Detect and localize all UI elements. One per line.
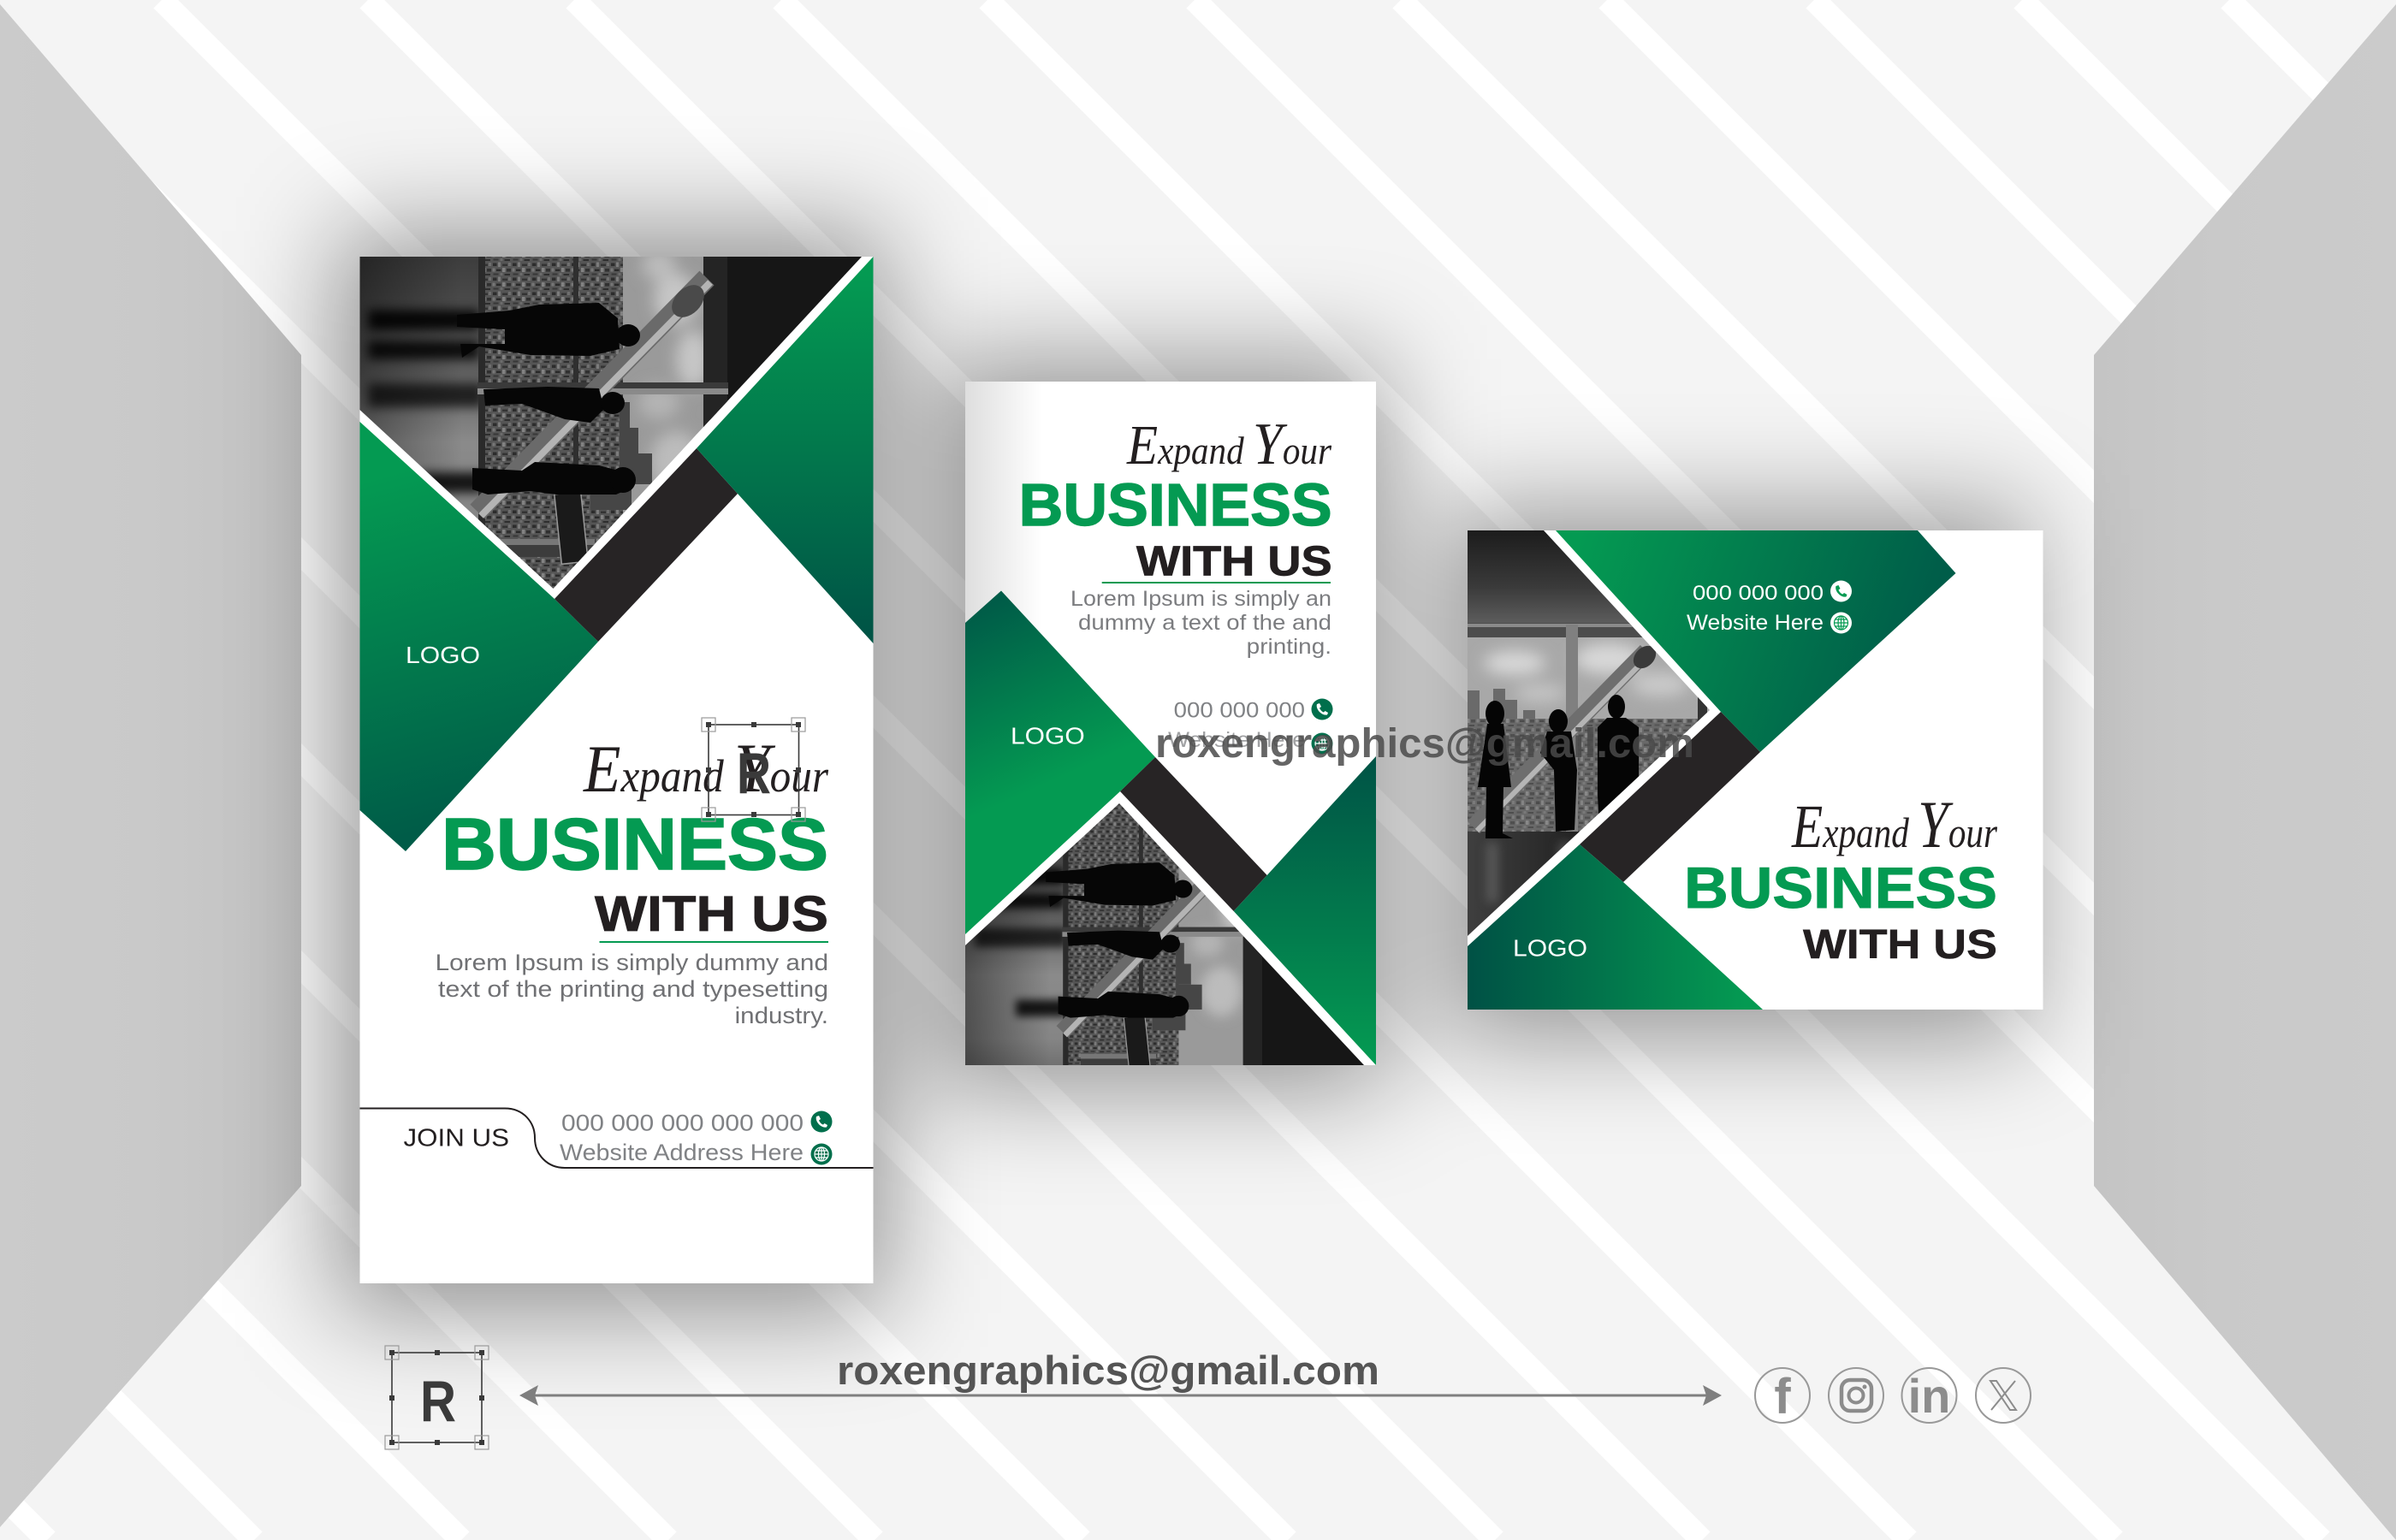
heading: business: BUSINESS (1019, 471, 1332, 538)
curved divider line (359, 1109, 873, 1168)
icon: phone (811, 1111, 832, 1133)
bottom email address: roxengraphics@gmail.com (837, 1348, 1379, 1393)
email watermark across flyers: roxengraphics@gmail.com (1155, 721, 1694, 767)
bottom logo frame (385, 1346, 489, 1449)
left grey wall (0, 4, 301, 1527)
green underline (599, 941, 828, 943)
website address: Website Here (1687, 611, 1824, 635)
green shape with logo area (359, 422, 598, 851)
icon: globe (1311, 732, 1333, 755)
photo: office silhouettes rotated (359, 257, 862, 589)
body text: Lorem Ipsum is simply an (1070, 587, 1331, 611)
green top shape (1556, 530, 1956, 752)
dark diagonal band (555, 448, 738, 642)
soft card shadows (338, 231, 2028, 1313)
icon: globe (1830, 613, 1852, 633)
panel: middle flyer (965, 382, 1376, 1065)
script heading: Expand Your (1126, 412, 1332, 477)
photo: office silhouettes rotated (965, 803, 1364, 1065)
logo text: LOGO (1011, 722, 1085, 749)
website address: Website Here (1168, 728, 1305, 752)
icon: phone (1830, 580, 1852, 602)
panel: tall left flyer (342, 205, 881, 1283)
phone number: 000 000 000 (1174, 699, 1305, 723)
panel: square flyer (1468, 530, 2043, 1010)
double-headed arrow (519, 1385, 1722, 1406)
heading: with us: WITH US (595, 886, 828, 942)
green underline (1102, 582, 1331, 583)
dark diagonal band (1580, 712, 1760, 882)
social icons (1755, 1368, 2031, 1424)
photo: office silhouettes upright (1468, 530, 1724, 951)
logo text: LOGO (1513, 934, 1587, 962)
icon: x (1976, 1368, 2031, 1423)
body text: dummy a text of the and (1078, 611, 1331, 635)
heading: business: BUSINESS (442, 804, 828, 886)
join us label: JOIN US (404, 1124, 509, 1152)
green right triangle (697, 257, 873, 643)
watermark logo frame (702, 718, 805, 821)
dark diagonal band (1120, 757, 1267, 911)
body text: text of the printing and typesetting (438, 976, 828, 1002)
body text: industry. (735, 1003, 828, 1028)
icon: phone (1311, 698, 1333, 720)
body text: Lorem Ipsum is simply dummy and (436, 950, 828, 975)
body text (1070, 587, 1331, 659)
icon: facebook (1755, 1368, 1810, 1424)
heading: business: BUSINESS (1684, 856, 1997, 921)
website address: Website Address Here (560, 1140, 804, 1165)
heading: with us: WITH US (1136, 539, 1332, 585)
body text (436, 950, 828, 1028)
phone number: 000 000 000 000 000 (561, 1111, 804, 1136)
icon: globe (811, 1143, 832, 1165)
body text: printing. (1247, 635, 1331, 659)
bottom logo frame: R (420, 1369, 456, 1434)
icon: instagram (1829, 1368, 1883, 1423)
green bottom shape (1468, 844, 1763, 1010)
heading: with us: WITH US (1803, 922, 1997, 968)
icon: linkedin: in (1908, 1369, 1950, 1423)
icon: facebook: f (1774, 1369, 1791, 1424)
card inner shading (965, 382, 1042, 638)
green shape with logo area (965, 590, 1155, 934)
script heading: Expand Your (583, 729, 829, 807)
watermark logo frame: R (737, 741, 771, 806)
green right triangle (1234, 756, 1376, 1065)
script heading: Expand Your (1791, 787, 1997, 862)
logo text: LOGO (406, 642, 480, 668)
phone number: 000 000 000 (1693, 582, 1824, 605)
right grey wall (2094, 4, 2396, 1540)
